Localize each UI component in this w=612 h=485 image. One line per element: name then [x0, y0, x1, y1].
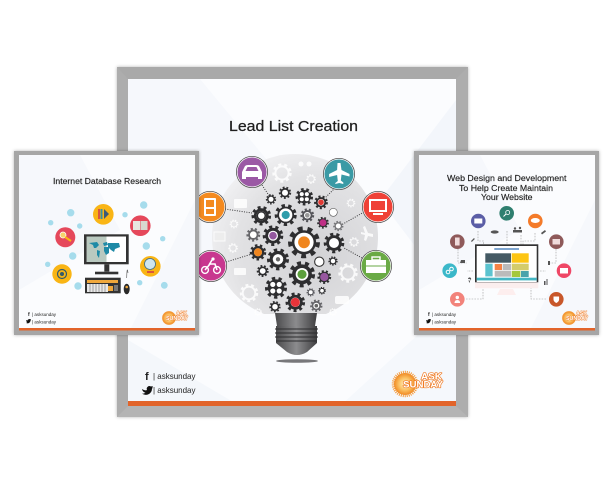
icon: airplane: [323, 158, 355, 190]
icon: books: [93, 204, 114, 225]
laptop monitor with web page layout: [475, 244, 538, 295]
mouse: [124, 270, 130, 294]
dotted connectors: [225, 185, 364, 262]
social handles: [426, 312, 457, 324]
gear cluster: [247, 187, 343, 311]
title: Web Design and Development To Help Create Maintain Your Website: Web Design and Development: [447, 174, 567, 183]
logo: Ask Sunday: ASK: [176, 311, 187, 317]
ghost background gears and icons: [214, 162, 373, 315]
social handles: f: [28, 312, 30, 318]
icon: globe: [140, 256, 161, 277]
small glyphs: [460, 227, 550, 285]
logo: Ask Sunday: SUNDAY: [166, 316, 189, 322]
bulb glass: [212, 154, 378, 314]
computer with world map: [84, 234, 130, 294]
title: Web Design and Development To Help Create Maintain Your Website: [447, 174, 567, 202]
social handles: | asksunday: [432, 312, 457, 317]
panel: Internet Database Research: [14, 151, 199, 335]
icon: phone: [194, 191, 226, 223]
keyboard: [85, 278, 121, 293]
icon: search: [499, 206, 514, 221]
social handles: | asksunday: [432, 320, 457, 324]
logo: Ask Sunday: [162, 311, 189, 324]
bulb screw base: [275, 313, 318, 363]
social handles: [142, 371, 196, 395]
icon: car: [236, 156, 268, 188]
icon: shield: [549, 292, 564, 307]
social handles: | asksunday: [153, 371, 196, 381]
social handles: | asksunday: [32, 320, 57, 324]
logo: Ask Sunday: [393, 372, 443, 396]
icon: gears: [442, 263, 457, 278]
icon: mail: [471, 214, 486, 228]
logo: Ask Sunday: [562, 311, 589, 324]
icon: monitor: [362, 191, 394, 223]
logo: Ask Sunday: ASK: [421, 372, 443, 382]
lightbulb illustration: [194, 154, 394, 363]
icon: atom: [52, 264, 72, 284]
monitor: [84, 234, 129, 274]
icon: bicycle: [195, 250, 227, 282]
icon: person: [450, 292, 465, 307]
icon: briefcase: [360, 250, 392, 282]
social handles: f: [145, 371, 149, 383]
panel: Web Design and Development: [414, 151, 599, 335]
social handles: [26, 312, 57, 324]
icon: tablet: [549, 234, 564, 249]
title: Lead List Creation: Lead List Creation: [229, 119, 358, 135]
icon: picture: [557, 263, 571, 278]
icon: magnifier: [55, 227, 75, 247]
logo: Ask Sunday: SUNDAY: [403, 380, 443, 390]
icon: mobile: [450, 234, 465, 249]
icon: chat cloud: [528, 214, 543, 228]
social handles: f: [428, 312, 430, 318]
panel: Lead List Creation: [117, 67, 468, 417]
social handles: | asksunday: [153, 385, 196, 395]
decorative blue dots: [45, 201, 168, 290]
title: Web Design and Development To Help Create Maintain Your Website: To Help Create Maintain: [459, 184, 553, 193]
logo: Ask Sunday: SUNDAY: [566, 316, 589, 322]
social handles: | asksunday: [32, 312, 57, 317]
title: Internet Database Research: Internet Database Research: [53, 177, 161, 186]
logo: Ask Sunday: ASK: [576, 311, 587, 317]
dashed connectors: [458, 231, 556, 299]
icon: open book: [130, 215, 151, 236]
title: Web Design and Development To Help Create Maintain Your Website: Your Website: [481, 193, 533, 202]
